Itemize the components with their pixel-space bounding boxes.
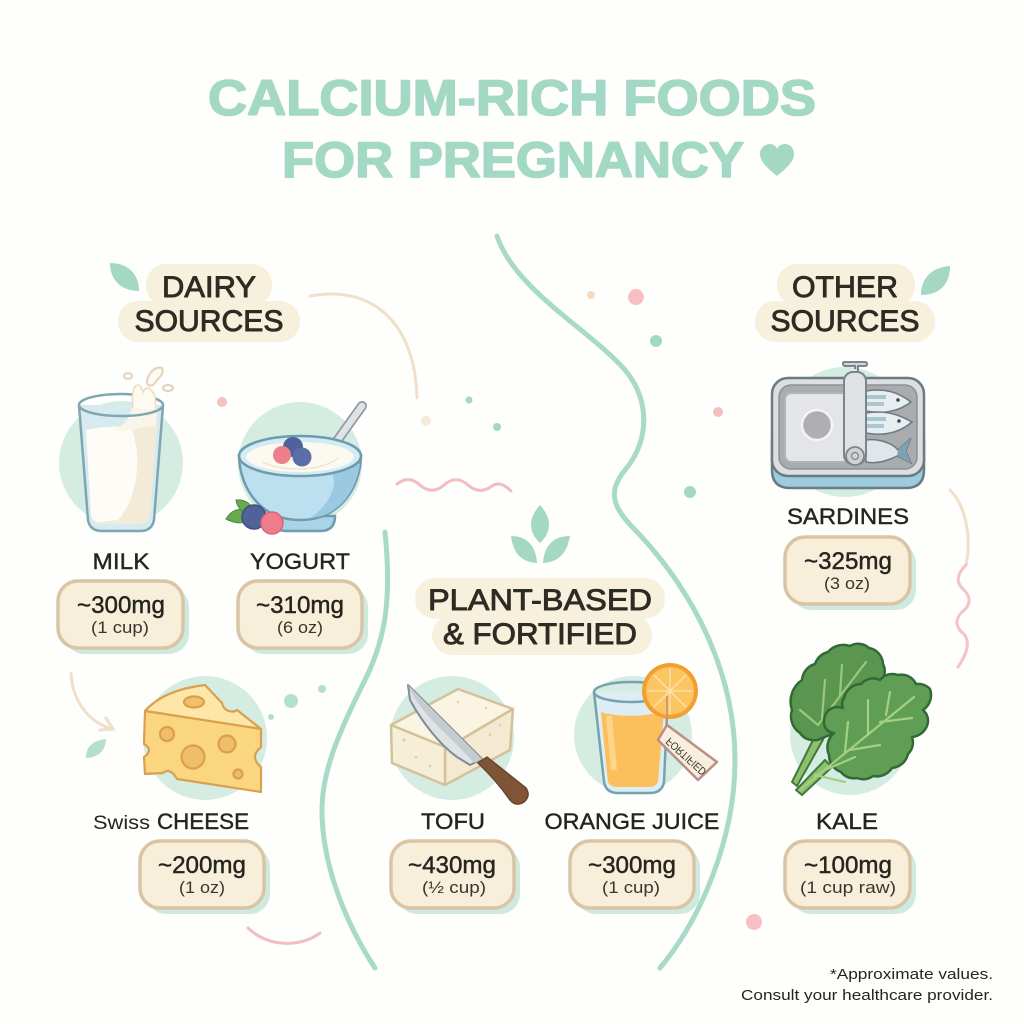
title: CALCIUM-RICH FOODS (208, 70, 816, 126)
food: tofu (390, 676, 528, 914)
value pill (140, 841, 270, 914)
label: Swiss (93, 813, 150, 834)
footnote (741, 966, 993, 1004)
label: SARDINES (787, 504, 909, 529)
icon: kale leaves (791, 644, 931, 795)
heading: dairy sources: DAIRY (162, 271, 256, 304)
label: TOFU (421, 809, 485, 834)
food: milk (58, 368, 189, 654)
value pill (570, 841, 700, 914)
heading: other sources (755, 264, 950, 342)
icon: cheese wedge (144, 685, 261, 792)
icon: milk glass (79, 368, 173, 531)
footnote: *Approximate values. (830, 966, 993, 983)
heading: other sources: OTHER (792, 271, 898, 304)
value pill: ~430mg (408, 852, 496, 879)
icon: yogurt bowl (226, 406, 362, 534)
title: FOR PREGNANCY (282, 132, 744, 188)
value pill: ~310mg (256, 592, 344, 619)
icon: leaf (921, 266, 950, 295)
icon: sardine tin (772, 362, 924, 488)
heading: plant-based and fortified (415, 505, 665, 655)
food: sardines (772, 362, 924, 610)
heading: other sources: SOURCES (770, 305, 920, 338)
value pill (238, 581, 368, 654)
value pill: (3 oz) (824, 575, 870, 593)
value pill: (½ cup) (422, 879, 486, 897)
value pill (391, 841, 520, 914)
icon: sprout (511, 505, 570, 563)
label: ORANGE JUICE (544, 809, 720, 834)
value pill (785, 841, 916, 914)
icon: heart (760, 144, 794, 176)
value pill: ~200mg (158, 852, 246, 879)
decorative swirls and dots (71, 289, 969, 943)
heading: plant-based and fortified: PLANT-BASED (428, 584, 652, 617)
label: CHEESE (157, 809, 249, 834)
silhouette: pregnant belly curves (322, 236, 735, 968)
value pill: (1 oz) (179, 879, 225, 897)
value pill: ~100mg (804, 852, 892, 879)
title (208, 70, 816, 188)
value pill (58, 581, 189, 654)
label: MILK (92, 549, 150, 574)
footnote: Consult your healthcare provider. (741, 987, 993, 1004)
value pill: (1 cup raw) (800, 879, 896, 897)
value pill: (1 cup) (91, 619, 149, 637)
label: YOGURT (250, 549, 350, 574)
heading: plant-based and fortified: & FORTIFIED (443, 618, 637, 651)
food: kale (785, 644, 931, 914)
value pill: ~325mg (804, 548, 892, 575)
icon: juice glass with orange slice and tag (594, 663, 717, 793)
food: swiss cheese (93, 676, 270, 914)
heading: dairy sources: SOURCES (134, 305, 284, 338)
heading: dairy sources (110, 263, 300, 342)
value pill (785, 537, 916, 610)
icon: juice glass with orange slice and tag: FORTIFIED (664, 735, 709, 777)
food: orange juice (544, 663, 720, 914)
icon: leaf (110, 263, 139, 291)
value pill: (6 oz) (277, 619, 323, 637)
value pill: ~300mg (588, 852, 676, 879)
label: KALE (816, 809, 878, 834)
label (93, 809, 249, 834)
food: yogurt (226, 402, 368, 654)
value pill: (1 cup) (602, 879, 660, 897)
icon: tofu block with knife (391, 685, 528, 804)
value pill: ~300mg (77, 592, 165, 619)
